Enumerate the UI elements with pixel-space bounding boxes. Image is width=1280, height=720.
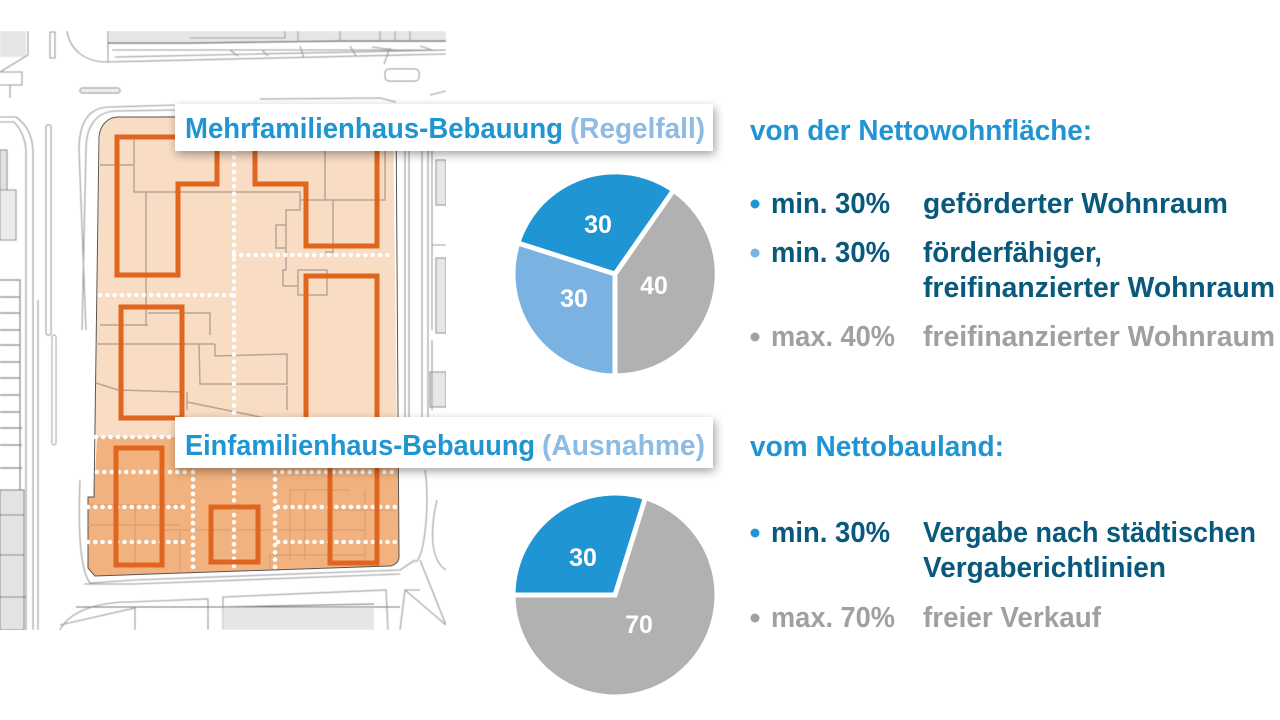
existing buildings outlines	[88, 137, 395, 570]
pie chart: Nettowohnfläche: 40	[640, 272, 668, 300]
row: förderfähiger, freifinanzierter Wohnraum: förderfähiger,	[923, 237, 1102, 269]
row: Vergabe nach städtischen Vergaberichtlinien: Vergabe nach städtischen	[923, 517, 1256, 549]
row: freier Verkauf	[750, 602, 1101, 634]
row: freier Verkauf: freier Verkauf	[923, 602, 1101, 634]
plot divider dotted lines	[88, 150, 399, 572]
row: förderfähiger, freifinanzierter Wohnraum: min. 30%	[771, 237, 890, 269]
row: förderfähiger, freifinanzierter Wohnraum	[750, 237, 1275, 304]
site plan map	[0, 31, 446, 630]
row: geförderter Wohnraum: min. 30%	[771, 188, 890, 220]
building footprints	[116, 130, 377, 565]
row: geförderter Wohnraum: geförderter Wohnraum	[923, 188, 1228, 220]
single-family-house zone	[88, 437, 399, 576]
row: Vergabe nach städtischen Vergaberichtlinien: Vergaberichtlinien	[923, 552, 1166, 584]
row: freifinanzierter Wohnraum	[750, 321, 1275, 353]
zone outline	[88, 112, 399, 576]
label: Einfamilienhaus-Bebauung	[175, 417, 715, 471]
label: Mehrfamilienhaus-Bebauung	[175, 104, 715, 154]
heading: vom Nettobauland:	[750, 431, 1004, 463]
legend: vom Nettobauland	[750, 431, 1256, 634]
pie chart: Nettobauland	[513, 496, 714, 695]
row: freier Verkauf: max. 70%	[771, 602, 895, 634]
row: freifinanzierter Wohnraum: max. 40%	[771, 321, 895, 353]
apartment-building zone	[95, 112, 397, 437]
pie chart: Nettowohnfläche: 30	[584, 211, 612, 239]
label: Mehrfamilienhaus-Bebauung: (Regelfall)	[570, 113, 705, 145]
label: Einfamilienhaus-Bebauung: Einfamilienhaus-Bebauung	[185, 430, 535, 462]
row: förderfähiger, freifinanzierter Wohnraum: freifinanzierter Wohnraum	[923, 272, 1275, 304]
surrounding streets and buildings	[0, 31, 446, 630]
row: freifinanzierter Wohnraum: freifinanzierter Wohnraum	[923, 321, 1275, 353]
label: Mehrfamilienhaus-Bebauung: Mehrfamilienhaus-Bebauung	[185, 113, 563, 145]
row: Vergabe nach städtischen Vergaberichtlinien: min. 30%	[771, 517, 890, 549]
pie chart: Nettobauland: 70	[625, 611, 653, 639]
pie chart: Nettowohnfläche	[516, 174, 715, 375]
row: Vergabe nach städtischen Vergaberichtlinien	[750, 517, 1256, 584]
label: Einfamilienhaus-Bebauung: (Ausnahme)	[542, 430, 705, 462]
pie chart: Nettobauland: 30	[569, 544, 597, 572]
heading: von der Nettowohnfläche:	[750, 115, 1092, 147]
pie chart: Nettowohnfläche: 30	[560, 285, 588, 313]
legend: von der Nettowohnfläche	[750, 115, 1275, 353]
row: geförderter Wohnraum	[750, 188, 1228, 220]
